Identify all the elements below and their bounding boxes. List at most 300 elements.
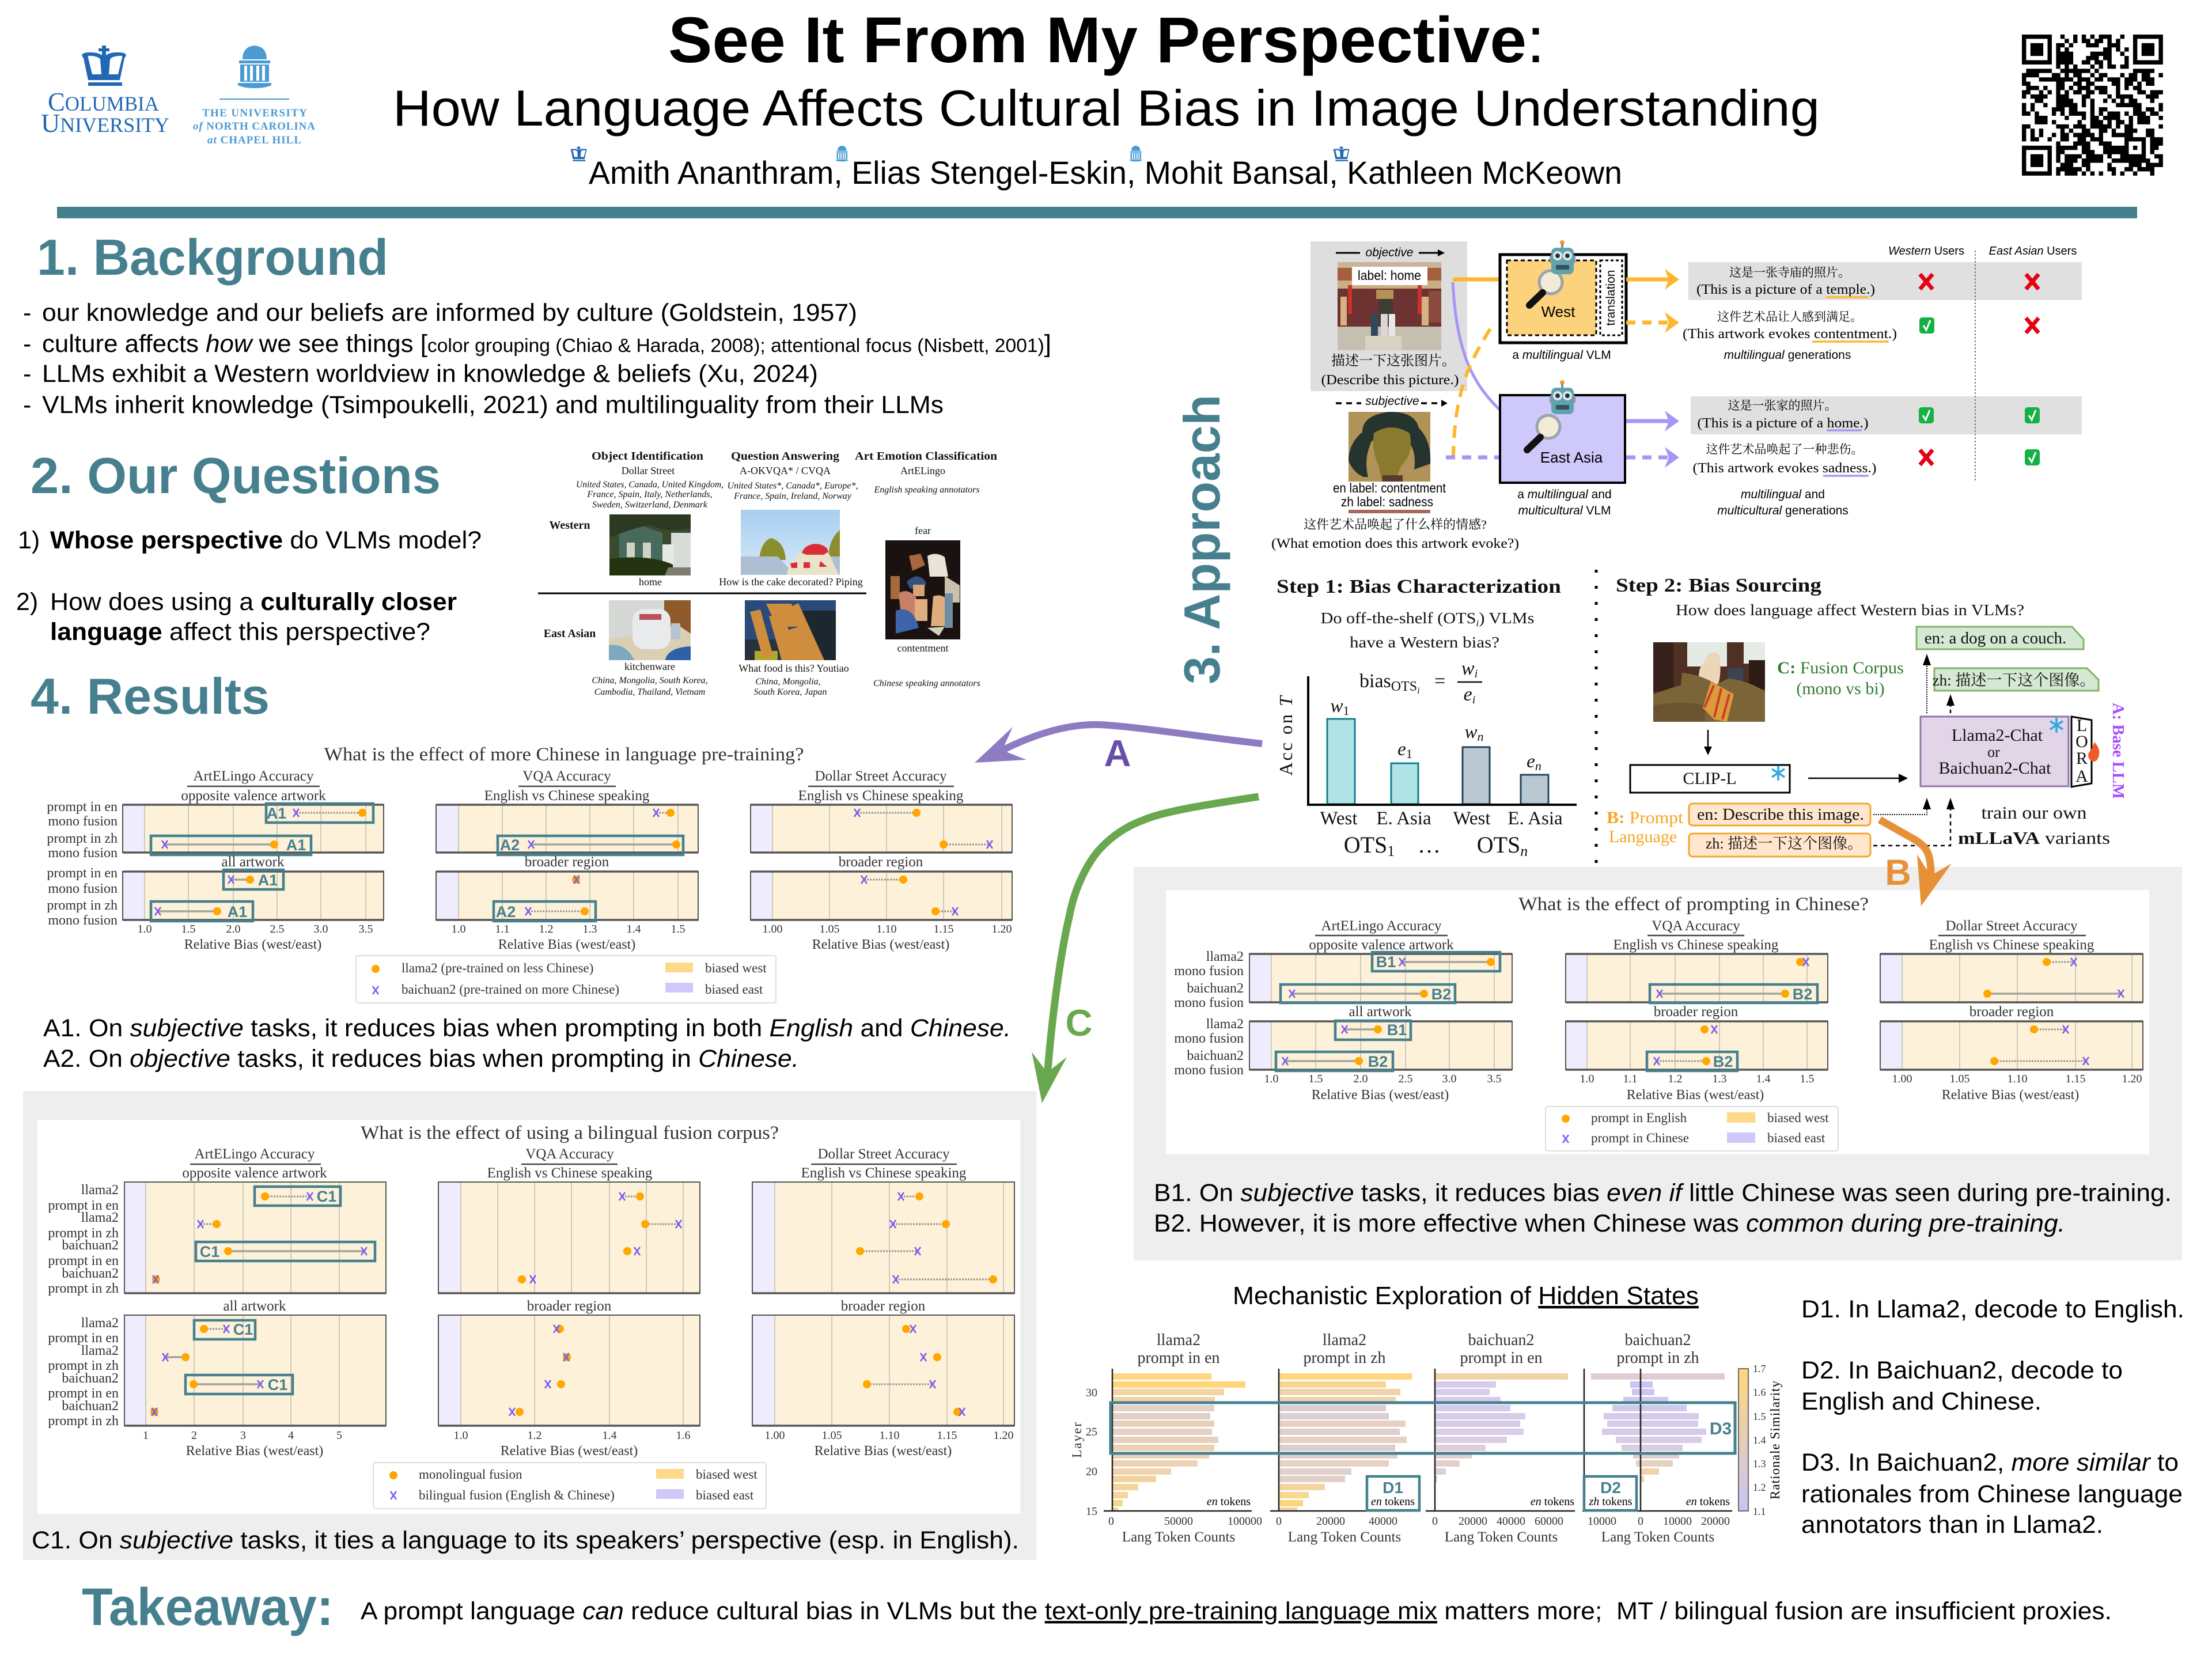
arrow: B [1880, 820, 1952, 906]
bullet list: - [23, 360, 31, 388]
legend: biased west [1767, 1111, 1829, 1125]
x axes [1264, 1073, 2142, 1103]
row labels: mono fusion [48, 814, 118, 829]
photo: rice cooker [609, 600, 691, 660]
panel: chart B prompting in Chinese [1134, 867, 2182, 1260]
row labels: prompt in zh [48, 1226, 119, 1241]
subplot titles [1137, 1331, 1699, 1367]
generation table: East Asian Users [1989, 245, 2077, 257]
formula: w [1461, 658, 1475, 679]
column headers: broader region [1654, 1004, 1738, 1020]
x axes: 1.0 [454, 1429, 468, 1442]
figure: dataset table: South Korea, Japan [754, 687, 827, 697]
box: base LLM: A [2075, 767, 2088, 786]
label: prompt language [1607, 808, 1684, 846]
panel: background [23, 229, 1051, 419]
findings A [43, 1014, 1011, 1073]
bar chart: accuracy: n [1520, 843, 1528, 859]
bullet list: - [23, 299, 31, 327]
generation table: multicultural generations [1717, 504, 1849, 517]
x axes: 1.00 [1892, 1073, 1912, 1085]
bullet list: culture affects how we see things [color grouping (Chiao & Harada, 2008); attentional focus (Nisbett, 2001) ] [42, 330, 1051, 358]
x axes: 1.05 [1949, 1073, 1970, 1085]
x axes: Relative Bias (west/east) [1942, 1088, 2079, 1103]
findings D: D3. In Baichuan2, more similar to [1801, 1449, 2179, 1476]
x axes: 1.2 [1668, 1073, 1682, 1085]
findings A: A2. On objective tasks, it reduces bias when prompting in Chinese. [43, 1045, 799, 1073]
plot: ArtELingo opposite valence: C1 [317, 1188, 336, 1205]
box: base LLM: Baichuan2-Chat [1939, 759, 2051, 778]
question list: 1) [18, 527, 40, 554]
subplot titles: prompt in zh [1616, 1349, 1699, 1367]
y axis: layer: 25 [1086, 1426, 1097, 1438]
column headers: Dollar Street Accuracy [1945, 918, 2078, 934]
figure: dataset table: Western [549, 519, 590, 532]
finding C: C1. On subjective tasks, it ties a language to its speakers’ perspective (esp. in English). [32, 1527, 1019, 1554]
output bubbles [1916, 627, 2099, 691]
plot: ArtELingo opposite valence [124, 1182, 386, 1293]
plot: ArtELingo all artwork: B1 [1387, 1021, 1407, 1039]
arrow: C [1032, 797, 1259, 1103]
bars: llama2 prompt in en [1104, 1369, 1252, 1511]
x axes: token counts: Lang Token Counts [1122, 1529, 1235, 1545]
panel: approach diagram overview [1271, 240, 2082, 551]
x axes: 2.0 [1354, 1073, 1368, 1085]
figure: dataset table: Cambodia, Thailand, Vietnam [594, 687, 705, 697]
x axes: 3.5 [358, 923, 373, 935]
x axes: 3.5 [1487, 1073, 1501, 1085]
callout: D2: zh tokens [1588, 1495, 1633, 1508]
column headers: all artwork [1349, 1004, 1412, 1020]
x axes [137, 923, 1012, 952]
box: CLIP-L: CLIP-L [1683, 769, 1737, 788]
plot: ArtELingo all artwork [123, 870, 384, 921]
generation table: multilingual generations [1724, 349, 1851, 362]
x axes: 1.20 [2122, 1073, 2142, 1085]
panel: step 1 bias characterization: ) VLMs [1479, 609, 1535, 627]
x axes: 1.10 [877, 923, 896, 935]
plot: VQA English vs Chinese: A2 [500, 836, 520, 854]
row labels: llama2 [81, 1183, 119, 1198]
figure: dataset table: kitchenware [624, 661, 675, 672]
x axes: Relative Bias (west/east) [1627, 1088, 1764, 1103]
column headers: English vs Chinese speaking [1929, 937, 2094, 953]
x axes: 1.10 [879, 1429, 900, 1442]
x axes: 1.0 [452, 923, 465, 935]
question list: How does using a culturally closer [50, 588, 457, 616]
row labels: baichuan2 [62, 1371, 119, 1386]
column headers: broader region [839, 854, 923, 870]
subtitle: How Language Affects Cultural Bias in Image Understanding [393, 79, 1820, 137]
x axes: token counts: Lang Token Counts [1445, 1529, 1558, 1545]
plot: VQA broader region [436, 872, 698, 921]
x axes: 1.5 [181, 923, 196, 935]
row labels: baichuan2 [1187, 1048, 1244, 1063]
x axes: Relative Bias (west/east) [184, 937, 321, 952]
plot: Dollar Street broader region [751, 872, 1012, 920]
bar chart: accuracy: 1 [1387, 843, 1395, 859]
row labels: prompt in zh [48, 1358, 119, 1373]
legend: biased east [1767, 1131, 1825, 1145]
row labels: mono fusion [1174, 1031, 1244, 1046]
legend: baichuan2 (pre-trained on more Chinese) [402, 982, 619, 997]
takeaway [82, 1578, 2112, 1637]
column headers: broader region [525, 854, 609, 870]
caption: train variants [1958, 802, 2110, 848]
bullet list: - [23, 391, 31, 419]
legend: biased east [696, 1488, 754, 1502]
panel: chart C bilingual fusion [23, 1091, 1036, 1560]
column headers: opposite valence artwork [1309, 937, 1454, 953]
figure: dataset table: How is the cake decorated? Piping [719, 576, 863, 588]
plot: ArtELingo all artwork [1249, 1021, 1512, 1071]
heading: background: 1. Background [37, 229, 388, 286]
label: fusion corpus: C: Fusion Corpus [1777, 658, 1904, 677]
x axes: token counts: 20000 [1701, 1515, 1730, 1528]
x axes: token counts: 10000 [1588, 1515, 1616, 1528]
bullet list: VLMs inherit knowledge (Tsimpoukelli, 2021) and multilinguality from their LLMs [42, 391, 944, 419]
x axes: 1.4 [627, 923, 641, 935]
legend: llama2 (pre-trained on less Chinese) [402, 961, 593, 975]
input panel: subjective example: 这件艺术品唤起了什么样的情感? [1304, 517, 1487, 532]
caption: train variants: train our own [1982, 802, 2087, 823]
column headers: broader region [527, 1298, 612, 1314]
bullet list: our knowledge and our beliefs are informed by culture (Goldstein, 1957) [42, 299, 857, 327]
panel: step 1 bias characterization: Do off-the-shelf (OTS [1320, 609, 1459, 627]
x axes: token counts [1108, 1515, 1730, 1545]
takeaway: Takeaway: [82, 1578, 334, 1637]
photo: temple with family [1338, 262, 1441, 350]
box: base LLM: O [2075, 732, 2088, 751]
box: base LLM: R [2076, 749, 2088, 768]
subplot titles: llama2 [1157, 1331, 1200, 1349]
chart title: What is the effect of more Chinese in language pre-training? [324, 744, 804, 765]
label: prompt language: B: Prompt [1607, 808, 1684, 827]
y axis: layer: 20 [1086, 1465, 1097, 1478]
model box: West multilingual VLM [1500, 240, 1626, 362]
column headers: VQA Accuracy [525, 1146, 614, 1162]
x axes: 1.10 [2007, 1073, 2028, 1085]
panel: step 2 bias sourcing: Step 2: Bias Sourcing [1616, 575, 1821, 596]
figure: dataset table: United States, Canada, United Kingdom, [576, 480, 724, 490]
findings D: D2. In Baichuan2, decode to [1801, 1357, 2123, 1384]
output bubbles: en: a dog on a couch. [1925, 629, 2066, 647]
colorbar: 1.1 [1753, 1506, 1766, 1517]
x axes: 2.0 [226, 923, 241, 935]
icons: author affiliations [570, 146, 1350, 161]
plot: VQA English vs Chinese [1566, 954, 1828, 1003]
panel: step 1 bias characterization [1275, 576, 1577, 859]
bar chart: accuracy: West [1453, 808, 1491, 829]
row labels: prompt in en [48, 1198, 119, 1213]
bars: baichuan2 prompt in en [1426, 1369, 1575, 1511]
row labels: llama2 [81, 1343, 119, 1358]
callout: D2: D2 [1600, 1479, 1621, 1497]
colorbar: 1.5 [1753, 1411, 1766, 1422]
y axis: layer [1070, 1387, 1097, 1518]
x axes: 1.20 [992, 923, 1012, 935]
figure: dataset table: Sweden, Switzerland, Denmark [592, 500, 708, 510]
legend: biased east [705, 982, 763, 997]
x axes: token counts: 50000 [1164, 1515, 1193, 1528]
model box: East Asia multicultural VLM: East Asia [1540, 449, 1603, 466]
figure: dataset table: home [639, 576, 662, 588]
generation table: 这是一张家的照片。 [1728, 399, 1836, 412]
x axes: 3.0 [313, 923, 328, 935]
model box: East Asia multicultural VLM: a multilingual and [1517, 488, 1612, 501]
row labels: mono fusion [48, 846, 118, 861]
callout: D1 [1367, 1476, 1419, 1510]
callout: D3: D3 [1710, 1419, 1732, 1438]
x axes: token counts: 20000 [1459, 1515, 1487, 1528]
findings B: B2. However, it is more effective when Chinese was common during pre-training. [1154, 1210, 2065, 1237]
plot: VQA English vs Chinese [436, 805, 698, 855]
column headers: VQA Accuracy [522, 768, 611, 784]
subplot titles: prompt in en [1137, 1349, 1220, 1367]
x axes: 1.6 [676, 1429, 690, 1442]
logo: UNC Chapel Hill: THE UNIVERSITY [202, 107, 307, 119]
row labels: mono fusion [48, 913, 118, 928]
prompt boxes [1689, 804, 1870, 857]
figure: dataset table: Object Identification [592, 450, 703, 463]
colorbar: 1.4 [1753, 1434, 1766, 1446]
figure: dataset table [538, 450, 997, 697]
bar chart: accuracy: Acc on T [1275, 694, 1296, 776]
colorbar [1738, 1363, 1782, 1517]
heading: our questions: 2. Our Questions [31, 447, 441, 504]
callout: D1: D1 [1382, 1479, 1403, 1497]
x axes: Relative Bias (west/east) [812, 937, 949, 952]
panel: mechanistic exploration [1070, 1282, 1782, 1545]
column headers: ArtELingo Accuracy [194, 768, 314, 784]
column headers: English vs Chinese speaking [484, 788, 650, 804]
bar chart: accuracy: w [1464, 722, 1478, 743]
row labels [1174, 949, 1244, 1078]
legend [373, 1463, 766, 1509]
findings D: D1. In Llama2, decode to English. [1801, 1296, 2184, 1323]
legend: prompt in English [1591, 1111, 1687, 1125]
row labels: llama2 [1206, 949, 1244, 964]
plot: ArtELingo opposite valence: C1 [200, 1243, 219, 1260]
generation table [1683, 245, 2082, 517]
figure: dataset table: fear [915, 525, 931, 536]
subplot titles: baichuan2 [1468, 1331, 1535, 1349]
x axes: 1.2 [539, 923, 553, 935]
colorbar: 1.2 [1753, 1482, 1766, 1493]
plot: VQA broader region [438, 1315, 700, 1426]
formula [1359, 658, 1482, 706]
model box: West multilingual VLM: translation [1604, 270, 1618, 325]
figure: dataset table: China, Mongolia, South Korea, [592, 676, 708, 685]
input panel: objective example: 描述一下这张图片。 [1331, 353, 1456, 369]
column headers: broader region [1969, 1004, 2054, 1020]
plot: VQA broader region: A2 [496, 903, 516, 921]
input panel: objective example: (Describe this picture.) [1321, 373, 1459, 388]
x axes: 1.3 [583, 923, 597, 935]
heading: results: 4. Results [31, 668, 270, 725]
row labels: baichuan2 [62, 1238, 119, 1253]
plot: ArtELingo opposite valence: A1 [267, 805, 286, 822]
bar chart: accuracy: … [1418, 832, 1441, 858]
input panel: subjective example [1271, 395, 1519, 551]
generation table: Western Users [1888, 245, 1964, 257]
panel: chart A pre-training [43, 744, 1012, 1073]
x axes: 1 [143, 1429, 149, 1442]
box: CLIP-L [1630, 765, 1790, 793]
input panel: objective example: label: home [1358, 268, 1421, 283]
x axes: token counts: 0 [1638, 1515, 1643, 1528]
figure: dataset table: ArtELingo [900, 465, 945, 476]
colorbar: 1.7 [1753, 1363, 1766, 1374]
bars: baichuan2 prompt in zh: en tokens [1686, 1495, 1730, 1508]
bullet list [23, 299, 1051, 419]
plot: VQA English vs Chinese: B2 [1793, 986, 1812, 1003]
findings D: annotators than in Llama2. [1801, 1511, 2103, 1539]
column headers: Dollar Street Accuracy [815, 768, 947, 784]
bullet list: LLMs exhibit a Western worldview in knowledge & beliefs (Xu, 2024) [42, 360, 818, 388]
x axes: 1.05 [821, 1429, 842, 1442]
chart title: What is the effect of using a bilingual fusion corpus? [361, 1123, 779, 1143]
photo: cake [741, 510, 840, 575]
title: See It From My Perspective : [668, 4, 1545, 76]
generation table: 这是一张寺庙的照片。 [1729, 266, 1850, 279]
callout: D2 [1584, 1476, 1637, 1510]
column headers [181, 768, 964, 870]
figure: dataset table: contentment [897, 642, 948, 654]
row labels: prompt in en [48, 1331, 119, 1346]
bar chart: accuracy [1275, 676, 1577, 859]
subplot titles: baichuan2 [1624, 1331, 1691, 1349]
panel: step 1 bias characterization: Step 1: Bias Characterization [1277, 576, 1561, 597]
x axes: token counts: 20000 [1316, 1515, 1345, 1528]
x axes: 2.5 [270, 923, 285, 935]
generation table: 这件艺术品唤起了一种悲伤。 [1706, 442, 1863, 456]
plot: Dollar Street English vs Chinese [751, 805, 1012, 853]
box: base LLM: or [1987, 744, 2000, 760]
row labels [48, 1183, 119, 1429]
bar chart: accuracy: OTS [1477, 832, 1520, 858]
column headers: English vs Chinese speaking [1613, 937, 1779, 953]
panel: our questions [16, 447, 482, 646]
photo: youtiao [745, 600, 836, 660]
box: base LLM [1921, 716, 2099, 787]
figure: dataset table: France, Spain, Ireland, Norway [733, 491, 852, 501]
row labels: prompt in zh [48, 1281, 119, 1296]
x axes: 1.00 [763, 923, 782, 935]
x axes: 1.4 [1756, 1073, 1771, 1085]
x axes: token counts: 10000 [1663, 1515, 1692, 1528]
plot: VQA broader region [1566, 1021, 1828, 1071]
row labels: baichuan2 [62, 1399, 119, 1414]
subplot titles: llama2 [1323, 1331, 1366, 1349]
formula: = [1434, 671, 1445, 692]
bar chart: accuracy: n [1478, 729, 1484, 744]
model box: East Asia multicultural VLM [1500, 380, 1625, 517]
photo: portrait painting [1349, 412, 1430, 482]
logo: UNC Chapel Hill: of NORTH CAROLINA [193, 120, 315, 132]
formula: e [1464, 684, 1472, 705]
x axes: 3.0 [1442, 1073, 1456, 1085]
x axes: 1.20 [993, 1429, 1014, 1442]
colorbar: 1.3 [1753, 1458, 1766, 1469]
takeaway: A prompt language can reduce cultural bias in VLMs but the text-only pre-training language mix matters more; MT / bilingual fusion are insufficient proxies. [361, 1597, 2112, 1625]
figure: dataset table: Art Emotion Classification [855, 450, 997, 463]
label: fusion corpus [1777, 658, 1904, 698]
plot: ArtELingo all artwork [124, 1315, 386, 1426]
bar chart: accuracy: OTS [1344, 832, 1387, 858]
figure: dataset table: English speaking annotators [873, 485, 980, 495]
bullet list: - [23, 330, 31, 358]
generation table: (This artwork evokes contentment.) [1683, 327, 1897, 342]
logo: UNC Chapel Hill: at CHAPEL HILL [207, 134, 301, 146]
model box: West multilingual VLM: a multilingual VLM [1512, 349, 1611, 362]
bar chart: accuracy: e [1527, 751, 1535, 772]
label: prompt language: Language [1609, 827, 1677, 846]
figure: dataset table: France, Spain, Italy, Netherlands, [586, 490, 713, 499]
generation table: (This is a picture of a home.) [1697, 416, 1869, 431]
column headers [182, 1146, 967, 1314]
heading: hidden states: Mechanistic Exploration of Hidden States [1233, 1282, 1699, 1310]
column headers: English vs Chinese speaking [487, 1165, 653, 1181]
x axes: 1.5 [671, 923, 685, 935]
column headers: ArtELingo Accuracy [195, 1146, 315, 1162]
formula: bias [1359, 671, 1391, 692]
x axes: 1.5 [1309, 1073, 1323, 1085]
formula: i [1417, 686, 1420, 696]
x axes: 2.5 [1399, 1073, 1412, 1085]
y axis: layer: 30 [1086, 1387, 1097, 1399]
column headers: English vs Chinese speaking [801, 1165, 967, 1181]
callout: D1: en tokens [1371, 1495, 1415, 1508]
x axes: 1.4 [603, 1429, 616, 1442]
findings D: English and Chinese. [1801, 1388, 2041, 1415]
input panel: subjective example: en label: contentment [1333, 480, 1446, 495]
x axes: 2 [191, 1429, 197, 1442]
photo: home [609, 514, 691, 575]
row labels: prompt in zh [47, 898, 118, 913]
x axes: token counts: Lang Token Counts [1601, 1529, 1714, 1545]
heading: approach: 3. Approach [1173, 395, 1230, 684]
row labels [47, 800, 118, 928]
row labels: mono fusion [1174, 1063, 1244, 1078]
prompt boxes: zh: 描述一下这个图像。 [1706, 835, 1862, 852]
label: base LLM: A: Base LLM [2109, 703, 2127, 799]
bars: llama2 prompt in zh [1270, 1369, 1419, 1511]
bar chart: accuracy: n [1535, 759, 1541, 773]
generation table: (This artwork evokes sadness.) [1692, 461, 1877, 476]
figure: dataset table: Question Answering [731, 450, 839, 463]
x axes: Relative Bias (west/east) [186, 1444, 323, 1459]
row labels: prompt in en [48, 1386, 119, 1401]
x axes: 1.1 [1623, 1073, 1637, 1085]
formula: i [1475, 668, 1478, 680]
plot: Dollar Street English vs Chinese [1880, 954, 2143, 1002]
plot: ArtELingo opposite valence [1249, 952, 1512, 1003]
x axes: Relative Bias (west/east) [815, 1444, 952, 1459]
plot: ArtELingo opposite valence: A1 [286, 836, 306, 854]
bar chart: accuracy: 1 [1343, 703, 1350, 718]
x axes: 3 [240, 1429, 246, 1442]
bar chart: accuracy: 1 [1406, 747, 1412, 761]
panel: step 2 bias sourcing: How does language affect Western bias in VLMs? [1676, 601, 2024, 619]
x axes: 5 [336, 1429, 342, 1442]
figure: dataset table: What food is this? Youtiao [738, 662, 849, 674]
x axes: token counts: Lang Token Counts [1288, 1529, 1401, 1545]
flow arrows [1873, 654, 1955, 846]
bar chart: accuracy: e [1397, 739, 1406, 760]
bar chart: accuracy: w [1330, 696, 1343, 717]
header rule [57, 207, 2137, 218]
